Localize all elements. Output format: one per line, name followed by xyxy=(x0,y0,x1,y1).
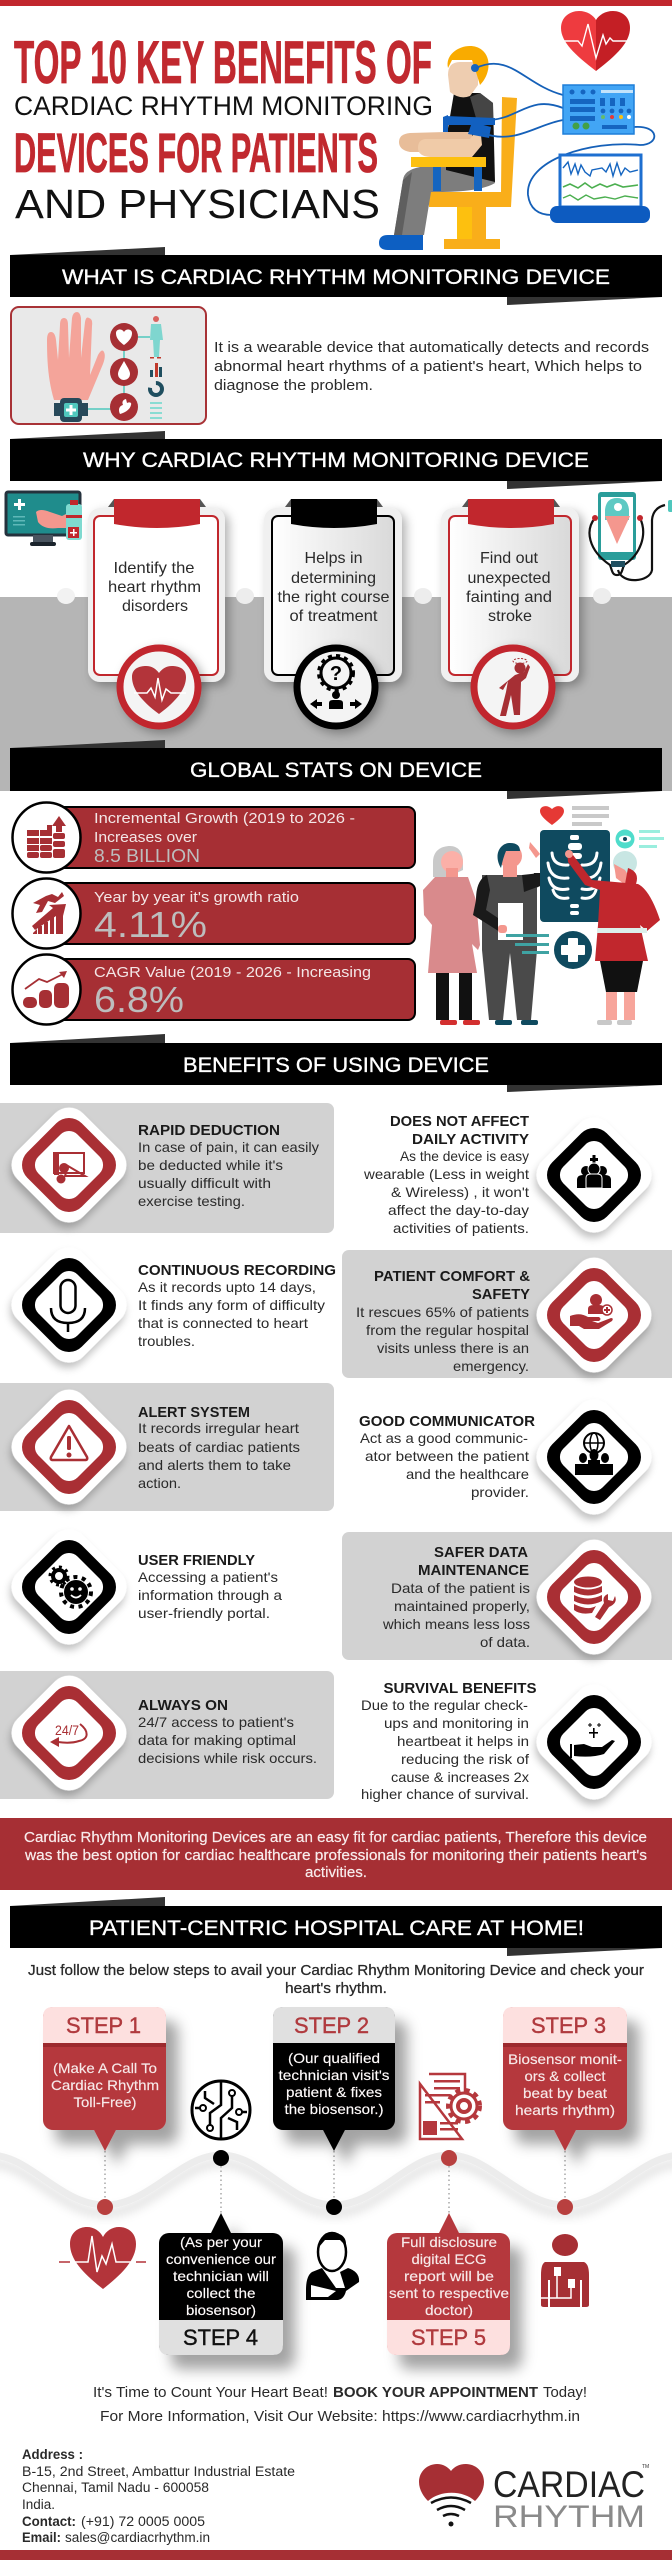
section heading: why xyxy=(10,431,662,489)
section heading: patient-centric care xyxy=(10,1897,662,1956)
benefit: does not affect daily activity: & Wireless) , it won't xyxy=(391,1184,529,1200)
logo: RHYTHM xyxy=(493,2498,645,2534)
icon: heart with ECG xyxy=(59,2227,146,2289)
card: identify the heart rhythm disorders: heart rhythm xyxy=(108,579,201,596)
step 5: STEP 5 xyxy=(411,2325,486,2350)
benefit: patient comfort and safety: SAFETY xyxy=(472,1287,530,1303)
icon: doctor xyxy=(150,316,163,358)
benefit: rapid deduction: exercise testing. xyxy=(138,1193,245,1209)
step 4 xyxy=(159,2213,283,2355)
contact details: B-15, 2nd Street, Ambattur Industrial Estate xyxy=(22,2464,295,2479)
benefit: patient comfort and safety: from the regular hospital xyxy=(366,1322,529,1338)
benefit: patient comfort and safety: visits unless there is an xyxy=(377,1340,529,1356)
x-ray panel xyxy=(540,830,610,922)
benefit: safer data maintenance: which means less loss xyxy=(382,1616,530,1632)
man centre xyxy=(473,842,540,1025)
icon: gear and person: ? xyxy=(330,663,342,685)
card: find out unexpected fainting and stroke: fainting and xyxy=(466,589,552,606)
step 3 xyxy=(503,2007,627,2151)
benefit: continuous recording: that is connected to heart xyxy=(138,1315,308,1331)
stat: incremental growth xyxy=(12,802,415,872)
call to action: It's Time to Count Your Heart Beat! xyxy=(93,2385,328,2401)
benefit: rapid deduction: be deducted while it's xyxy=(138,1157,283,1173)
section heading: what is xyxy=(10,247,662,305)
step 5: doctor) xyxy=(425,2302,473,2318)
illustration: doctors and x-ray xyxy=(423,806,664,1025)
icon: rising chart xyxy=(12,878,80,948)
benefit: always on: data for making optimal xyxy=(138,1732,296,1748)
card: find out unexpected fainting and stroke xyxy=(441,499,579,726)
step 5: digital ECG xyxy=(412,2251,486,2267)
benefit: rapid deduction: RAPID DEDUCTION xyxy=(138,1123,280,1139)
icon: diamond gears xyxy=(3,1521,135,1653)
benefit: user friendly: USER FRIENDLY xyxy=(138,1553,255,1569)
step 2: the biosensor.) xyxy=(284,2101,384,2117)
step 4: collect the xyxy=(186,2285,256,2301)
teal lines xyxy=(506,934,549,954)
title: DEVICES FOR PATIENTS xyxy=(14,121,378,184)
step 1: Toll-Free) xyxy=(74,2094,136,2110)
logo: TM xyxy=(642,2464,649,2470)
step 3: ors & collect xyxy=(524,2068,606,2084)
card: helps in determining the right course of treatment: Helps in xyxy=(304,550,362,567)
benefit: does not affect daily activity: wearable (Less in weight xyxy=(363,1166,529,1182)
card: find out unexpected fainting and stroke: stroke xyxy=(488,608,532,625)
icon: person with arm sling xyxy=(306,2233,359,2300)
step 5 xyxy=(387,2213,510,2355)
icon: diamond 24/7 xyxy=(3,1667,135,1799)
contact details: Chennai, Tamil Nadu - 600058 xyxy=(22,2480,209,2495)
card: find out unexpected fainting and stroke: unexpected xyxy=(468,570,550,587)
benefit: does not affect daily activity: DOES NOT AFFECT xyxy=(390,1114,529,1130)
stat: growth ratio: Year by year it's growth ratio xyxy=(94,889,299,906)
step 4: (As per your xyxy=(180,2234,262,2250)
title: AND PHYSICIANS xyxy=(15,181,380,227)
icon: heart with ECG line xyxy=(561,11,630,71)
benefit: survival benefits: ups and monitoring in xyxy=(384,1715,529,1731)
title: CARDIAC RHYTHM MONITORING xyxy=(14,91,433,121)
step 4: technician will xyxy=(173,2268,269,2284)
monitor xyxy=(550,155,650,223)
text block: definition: diagnose the problem. xyxy=(214,377,373,394)
call to action: Today! xyxy=(543,2385,587,2401)
benefit: good communicator: provider. xyxy=(471,1484,529,1500)
patient xyxy=(379,46,495,250)
benefit: patient comfort and safety xyxy=(356,1249,660,1381)
intro text xyxy=(28,1963,644,1997)
benefit: survival benefits: reducing the risk of xyxy=(401,1751,529,1767)
icon: coin stacks xyxy=(12,802,80,872)
benefit: safer data maintenance: Data of the patient is xyxy=(391,1580,530,1596)
step 5: Full disclosure xyxy=(401,2234,497,2250)
contact details: sales@cardiacrhythm.in xyxy=(65,2530,210,2545)
stat: incremental growth: Incremental Growth (2019 to 2026 - xyxy=(94,810,355,827)
card: identify the heart rhythm disorders: disorders xyxy=(122,598,188,615)
top bar xyxy=(0,0,672,6)
heart and lines xyxy=(540,806,664,848)
section heading: global stats: GLOBAL STATS ON DEVICE xyxy=(190,759,482,782)
woman left xyxy=(423,846,480,1025)
bottom bar xyxy=(0,2550,672,2560)
summary banner xyxy=(0,1818,672,1890)
section heading: benefits xyxy=(10,1034,662,1092)
icon: gear and person xyxy=(297,648,375,726)
benefit panels xyxy=(0,1103,672,1799)
benefit: alert system: It records irregular heart xyxy=(138,1420,299,1436)
benefit: good communicator: and the healthcare xyxy=(406,1466,529,1482)
section heading: patient-centric care: PATIENT-CENTRIC HOSPITAL CARE AT HOME! xyxy=(89,1917,584,1940)
stat: growth ratio: 4.11% xyxy=(94,904,207,945)
benefit: good communicator: GOOD COMMUNICATOR xyxy=(359,1414,535,1430)
benefit: patient comfort and safety: It rescues 65% of patients xyxy=(356,1304,529,1320)
step 2 xyxy=(273,2007,395,2151)
step 2: STEP 2 xyxy=(294,2013,369,2038)
wave path with dotted connectors xyxy=(0,2150,672,2215)
chair xyxy=(429,97,517,249)
benefit: alert system: ALERT SYSTEM xyxy=(138,1405,250,1421)
icon: diamond warning xyxy=(3,1381,135,1513)
mini charts xyxy=(150,363,162,419)
card: helps in determining the right course of treatment: of treatment xyxy=(290,608,378,625)
benefit: patient comfort and safety: PATIENT COMFORT & xyxy=(374,1269,530,1285)
benefit: survival benefits: SURVIVAL BENEFITS xyxy=(384,1681,537,1697)
benefit: survival benefits: cause & increases 2x xyxy=(391,1769,529,1785)
icon: hand xyxy=(47,312,105,400)
step 4: STEP 4 xyxy=(183,2325,258,2350)
logo xyxy=(419,2464,649,2534)
step 1: (Make A Call To xyxy=(53,2060,157,2076)
benefit: continuous recording: CONTINUOUS RECORDING xyxy=(138,1263,336,1279)
contact details: Address : xyxy=(22,2447,83,2462)
benefit: survival benefits xyxy=(361,1676,660,1808)
step 2: technician visit's xyxy=(278,2067,390,2083)
benefit: good communicator xyxy=(359,1391,660,1523)
benefit: rapid deduction: usually difficult with xyxy=(138,1175,271,1191)
icon: circuit brain xyxy=(192,2081,250,2139)
stat: CAGR value: 6.8% xyxy=(94,979,184,1020)
wires xyxy=(476,64,654,215)
card: identify the heart rhythm disorders: Identify the xyxy=(114,560,195,577)
intro text: Just follow the below steps to avail your Cardiac Rhythm Monitoring Device and check your xyxy=(28,1963,644,1979)
icon: diamond globe and team xyxy=(528,1391,660,1523)
section heading: why: WHY CARDIAC RHYTHM MONITORING DEVICE xyxy=(83,449,589,472)
benefit: alert system: and alerts them to take xyxy=(138,1457,291,1473)
step 3: hearts rhythm) xyxy=(515,2102,615,2118)
benefit: user friendly: Accessing a patient's xyxy=(138,1569,278,1585)
benefit: alert system: beats of cardiac patients xyxy=(138,1439,300,1455)
benefit: alert system: action. xyxy=(138,1475,181,1491)
summary banner: activities. xyxy=(305,1865,367,1881)
woman right xyxy=(565,850,660,1025)
benefit: does not affect daily activity: As the device is easy xyxy=(400,1148,529,1164)
summary banner: Cardiac Rhythm Monitoring Devices are an easy fit for cardiac patients, Therefore this device xyxy=(24,1830,647,1846)
contact details: Email: xyxy=(22,2530,61,2545)
icon: diamond microphone xyxy=(3,1239,135,1371)
section heading: what is: WHAT IS CARDIAC RHYTHM MONITORING DEVICE xyxy=(62,266,610,289)
benefit: rapid deduction xyxy=(3,1099,319,1231)
icon: heart ECG xyxy=(120,648,198,726)
title xyxy=(14,29,433,227)
illustration: patient on chair connected to monitor xyxy=(379,46,654,250)
benefit: safer data maintenance xyxy=(382,1531,660,1663)
call to action xyxy=(93,2385,587,2425)
benefit: always on: 24/7 access to patient's xyxy=(138,1714,294,1730)
benefit: does not affect daily activity: activities of patients. xyxy=(393,1220,529,1236)
benefit: survival benefits: heartbeat it helps in xyxy=(397,1733,529,1749)
contact details xyxy=(22,2447,295,2545)
benefit: safer data maintenance: MAINTENANCE xyxy=(418,1563,529,1579)
icon: bars with trend xyxy=(12,954,80,1024)
card: identify the heart rhythm disorders xyxy=(88,499,225,726)
call to action: BOOK YOUR APPOINTMENT xyxy=(333,2385,538,2401)
step 4: biosensor) xyxy=(186,2302,256,2318)
benefit: always on: ALWAYS ON xyxy=(138,1698,228,1714)
step 5: sent to respective xyxy=(389,2285,509,2301)
step 5: report will be xyxy=(404,2268,494,2284)
card: helps in determining the right course of treatment: determining xyxy=(291,570,376,587)
benefit: does not affect daily activity: affect the day-to-day xyxy=(388,1202,529,1218)
intro text: heart's rhythm. xyxy=(285,1981,387,1997)
benefit: safer data maintenance: of data. xyxy=(480,1634,530,1650)
text block: definition: It is a wearable device that automatically detects and records xyxy=(214,339,649,356)
summary banner: was the best option for cardiac healthcare professionals for monitoring their patients heart's xyxy=(24,1848,647,1864)
section heading: global stats xyxy=(10,740,662,799)
stat: CAGR value xyxy=(12,954,415,1024)
step 3: Biosensor monit- xyxy=(508,2051,622,2067)
step 2: (Our qualified xyxy=(288,2050,380,2066)
benefit: always on: decisions while risk occurs. xyxy=(138,1750,317,1766)
call to action: For More Information, Visit Our Website: https://www.cardiacrhythm.in xyxy=(100,2409,580,2425)
stat: CAGR value: CAGR Value (2019 - 2026 - Increasing xyxy=(94,964,371,981)
benefit: safer data maintenance: maintained properly, xyxy=(394,1598,530,1614)
device xyxy=(563,85,634,134)
text block: definition: abnormal heart rhythms of a patient's heart, Which helps to xyxy=(214,358,642,375)
benefit: alert system xyxy=(3,1381,300,1513)
step 1: STEP 1 xyxy=(66,2013,141,2038)
stat: growth ratio xyxy=(12,878,415,948)
benefit: always on xyxy=(3,1667,317,1799)
icon: phone with doctor and stethoscope xyxy=(590,492,672,580)
contact details: Contact: xyxy=(22,2514,76,2529)
benefit: does not affect daily activity xyxy=(363,1109,660,1241)
benefit: continuous recording xyxy=(3,1239,336,1371)
stat: incremental growth: Increases over xyxy=(94,829,197,846)
benefit: user friendly xyxy=(3,1521,282,1653)
background band xyxy=(0,588,672,791)
icon: diamond hand and plus xyxy=(528,1676,660,1808)
text block: definition xyxy=(214,339,649,394)
step 2: patient & fixes xyxy=(286,2084,382,2100)
benefit: survival benefits: Due to the regular check- xyxy=(361,1697,528,1713)
icon: watch xyxy=(54,398,88,422)
benefit: does not affect daily activity: DAILY ACTIVITY xyxy=(412,1132,529,1148)
contact details: (+91) 72 0005 0005 xyxy=(81,2514,205,2529)
icon: document with gear xyxy=(420,2074,480,2139)
card: find out unexpected fainting and stroke: Find out xyxy=(480,550,539,567)
step 3: beat by beat xyxy=(523,2085,607,2101)
step 4: convenience our xyxy=(166,2251,276,2267)
contact details: India. xyxy=(22,2497,55,2512)
step 1: Cardiac Rhythm xyxy=(51,2077,159,2093)
plus circle xyxy=(554,931,592,969)
benefit: patient comfort and safety: emergency. xyxy=(453,1358,529,1374)
benefit: continuous recording: As it records upto 14 days, xyxy=(138,1279,316,1295)
benefit: continuous recording: It finds any form of difficulty xyxy=(138,1297,325,1313)
step 3: STEP 3 xyxy=(531,2013,606,2038)
benefit: user friendly: information through a xyxy=(138,1587,282,1603)
icon: diamond film xyxy=(3,1099,135,1231)
benefit: user friendly: user-friendly portal. xyxy=(138,1605,270,1621)
step 1 xyxy=(43,2007,166,2151)
logo: CARDIAC xyxy=(493,2464,645,2505)
card: helps in determining the right course of treatment xyxy=(264,499,402,726)
icon: diamond people xyxy=(528,1109,660,1241)
benefit: safer data maintenance: SAFER DATA xyxy=(434,1545,528,1561)
card: helps in determining the right course of treatment: the right course xyxy=(278,589,390,606)
benefit: continuous recording: troubles. xyxy=(138,1333,195,1349)
icon: diamond hand and patient xyxy=(528,1249,660,1381)
icon: diamond database and wrench xyxy=(528,1531,660,1663)
icon: health circles xyxy=(110,323,138,421)
icon: monitor with hand and bottle xyxy=(6,492,82,546)
benefit: good communicator: ator between the patient xyxy=(365,1448,529,1464)
benefit: rapid deduction: In case of pain, it can easily xyxy=(138,1139,319,1155)
stat: incremental growth: 8.5 BILLION xyxy=(94,845,200,866)
icon: diamond 24/7: 24/7 xyxy=(55,1722,79,1738)
icon: fainting person xyxy=(474,648,552,726)
panel: wearable device illustration xyxy=(11,307,206,424)
benefit: good communicator: Act as a good communic- xyxy=(360,1430,528,1446)
benefit: survival benefits: higher chance of survival. xyxy=(361,1786,529,1802)
icon: person with ECG leads xyxy=(541,2234,589,2307)
section heading: benefits: BENEFITS OF USING DEVICE xyxy=(183,1054,489,1077)
